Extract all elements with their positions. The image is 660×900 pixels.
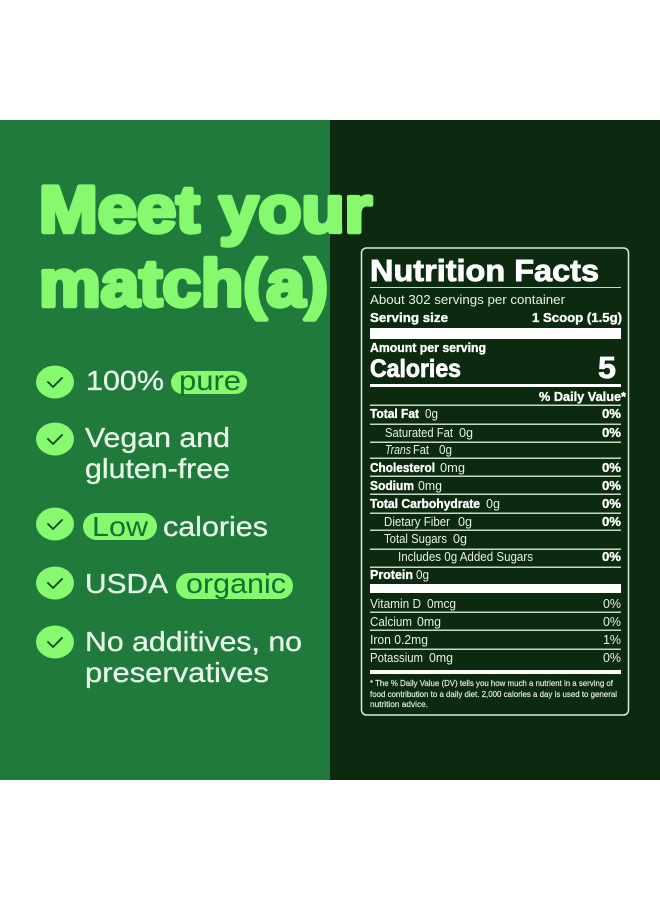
serving information — [370, 293, 622, 325]
footnote: food contribution to a daily diet. 2,000 calories a day is used to general — [370, 689, 617, 699]
nutrient rows — [370, 407, 621, 582]
serving information: Serving size — [370, 311, 448, 325]
benefit: vegan and gluten-free: gluten-free — [85, 453, 230, 484]
nutrient rows: 0g — [458, 515, 472, 529]
benefits list — [36, 365, 302, 688]
benefit: USDA organic: organic — [186, 568, 286, 599]
nutrient rows: Fat — [413, 443, 429, 457]
calories block: Calories — [370, 355, 461, 383]
nutrient rows: 0g — [486, 497, 500, 511]
nutrient rows: Includes 0g Added Sugars — [398, 550, 533, 564]
calories block — [370, 341, 616, 385]
nutrient rows: Cholesterol — [370, 461, 435, 475]
benefit: 100% pure — [36, 365, 247, 398]
vitamins and minerals: 1% — [603, 633, 621, 647]
vitamins and minerals: Vitamin D — [370, 597, 421, 611]
benefit: low calories: Low — [92, 511, 148, 542]
title — [39, 172, 372, 320]
vitamins and minerals: 0mg — [429, 651, 453, 665]
calories block: Amount per serving — [370, 341, 486, 355]
benefit: low calories — [36, 508, 268, 542]
nutrient rows: Sodium — [370, 479, 414, 493]
benefit: 100% pure: pure — [179, 365, 241, 396]
nutrient rows: Saturated Fat — [385, 426, 453, 440]
benefit: no additives — [36, 626, 302, 688]
nutrient rows: Total Sugars — [384, 532, 447, 546]
vitamins and minerals — [370, 597, 621, 665]
benefit: no additives: preservatives — [85, 657, 269, 688]
nutrient rows: 0mg — [440, 461, 465, 475]
nutrient rows: Total Fat — [370, 407, 420, 421]
calories block: 5 — [598, 350, 616, 385]
nutrient rows: 0% — [602, 497, 621, 511]
serving information: 1 Scoop (1.5g) — [532, 311, 622, 325]
benefit: USDA organic — [36, 566, 293, 600]
vitamins and minerals: 0mcg — [427, 597, 456, 611]
footnote: nutrition advice. — [370, 699, 428, 709]
benefit: no additives: No additives, no — [85, 626, 302, 657]
benefit: vegan and gluten-free: Vegan and — [85, 422, 230, 453]
footnote — [370, 678, 617, 709]
nutrient rows: 0g — [425, 407, 438, 421]
daily value heading: % Daily Value* — [539, 390, 626, 404]
title: Meet your — [39, 172, 372, 246]
vitamins and minerals: 0% — [603, 651, 621, 665]
nutrient rows: 0g — [453, 532, 467, 546]
footnote: * The % Daily Value (DV) tells you how much a nutrient in a serving of — [370, 678, 614, 688]
serving information: About 302 servings per container — [370, 293, 565, 307]
nutrient rows: Trans — [385, 443, 411, 457]
vitamins and minerals: 0mg — [417, 615, 441, 629]
benefit: USDA organic: USDA — [85, 568, 169, 599]
nutrient rows: 0g — [439, 443, 452, 457]
nutrient rows: 0% — [602, 426, 621, 440]
title: match(a) — [39, 246, 328, 320]
nutrient rows: 0g — [416, 568, 429, 582]
nutrient rows: 0g — [459, 426, 473, 440]
nutrient rows: 0% — [602, 407, 621, 421]
panel: dark background — [330, 120, 660, 780]
benefit: vegan and gluten-free — [36, 422, 230, 484]
panel: green background — [0, 120, 330, 780]
nutrient rows: 0% — [602, 515, 621, 529]
vitamins and minerals: 0% — [603, 597, 621, 611]
vitamins and minerals: Iron 0.2mg — [370, 633, 428, 647]
vitamins and minerals: 0% — [603, 615, 621, 629]
nutrient rows: 0% — [602, 550, 621, 564]
nutrient rows: Total Carbohydrate — [370, 497, 480, 511]
nutrient rows: 0mg — [418, 479, 442, 493]
vitamins and minerals: Potassium — [370, 651, 423, 665]
nutrient rows: Dietary Fiber — [384, 515, 450, 529]
nutrition heading: Nutrition Facts — [370, 253, 599, 288]
benefit: low calories: calories — [163, 511, 268, 542]
vitamins and minerals: Calcium — [370, 615, 412, 629]
nutrient rows: 0% — [602, 479, 621, 493]
benefit: 100% pure: 100% — [86, 365, 164, 396]
nutrition facts panel — [362, 248, 628, 715]
nutrient rows: Protein — [370, 568, 413, 582]
nutrient rows: 0% — [602, 461, 621, 475]
